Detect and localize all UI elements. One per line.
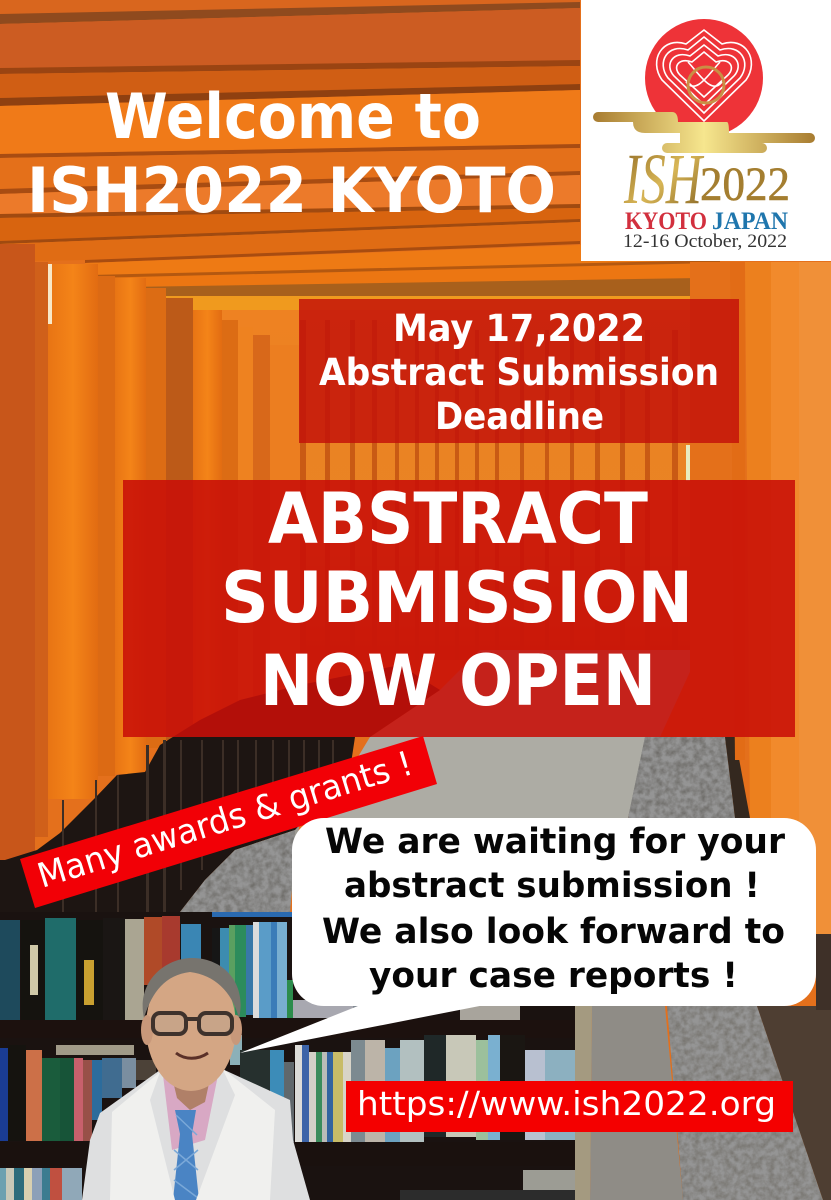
smile bbox=[176, 1053, 208, 1058]
title: ISH2022 KYOTO bbox=[27, 154, 556, 227]
speech bubble: We are waiting for your bbox=[325, 822, 786, 862]
logo wordmark: 12-16 October, 2022 bbox=[623, 231, 787, 252]
main banner: abstract submission now open bbox=[123, 478, 795, 737]
logo wordmark: ISH bbox=[623, 139, 705, 219]
speech bubble: your case reports ! bbox=[369, 956, 738, 996]
left pillars bbox=[0, 244, 300, 864]
black pillar bases bbox=[0, 665, 440, 912]
white coat bbox=[82, 1068, 310, 1200]
blue tie bbox=[173, 1110, 199, 1200]
pink shirt bbox=[163, 1075, 218, 1150]
top row of books bbox=[0, 912, 575, 1020]
glasses bbox=[153, 1013, 232, 1034]
gravel bbox=[170, 730, 830, 1200]
speech bubble: We also look forward to bbox=[322, 912, 785, 952]
deadline panel: Deadline bbox=[435, 395, 604, 438]
concrete walkway lower bbox=[590, 1006, 683, 1200]
logo wordmark: KYOTO bbox=[625, 208, 707, 235]
bookshelf photo bbox=[0, 912, 575, 1200]
lower shelf bbox=[0, 1142, 575, 1166]
hair bbox=[143, 958, 241, 1018]
face bbox=[146, 963, 236, 1091]
main banner: abstract submission now open: SUBMISSION bbox=[221, 557, 693, 639]
tunnel interior bbox=[220, 310, 700, 660]
website url box: https://www.ish2022.org bbox=[357, 1084, 776, 1123]
deadline panel bbox=[299, 299, 739, 443]
bottom row of books bbox=[0, 1168, 575, 1200]
portrait of speaker bbox=[82, 958, 310, 1200]
shelf bbox=[0, 1020, 575, 1038]
logo wordmark bbox=[623, 139, 790, 252]
logo wordmark: 2022 bbox=[700, 158, 790, 211]
deadline panel: May 17,2022 bbox=[393, 307, 645, 350]
speech bubble bbox=[240, 818, 816, 1053]
website url box bbox=[346, 1081, 793, 1132]
icon: gold clouds bbox=[593, 112, 815, 153]
neck bbox=[168, 1060, 214, 1110]
deadline panel: Abstract Submission bbox=[319, 351, 719, 394]
path bbox=[295, 650, 700, 830]
title bbox=[27, 80, 556, 227]
logo panel bbox=[581, 0, 831, 261]
icon: red sun with knot heart bbox=[645, 19, 763, 137]
awards ribbon: Many awards & grants ! bbox=[33, 744, 417, 897]
bright gap between gates bbox=[686, 445, 693, 481]
middle row of books bbox=[0, 1035, 575, 1142]
right pillars bbox=[690, 262, 831, 1200]
ceiling beams bbox=[0, 0, 720, 310]
speech bubble: abstract submission ! bbox=[344, 866, 760, 906]
coat lapels bbox=[110, 1068, 275, 1200]
title: Welcome to bbox=[105, 80, 481, 153]
logo wordmark: JAPAN bbox=[712, 208, 788, 235]
main banner: abstract submission now open: NOW OPEN bbox=[260, 640, 656, 722]
main banner: abstract submission now open: ABSTRACT bbox=[268, 478, 648, 560]
